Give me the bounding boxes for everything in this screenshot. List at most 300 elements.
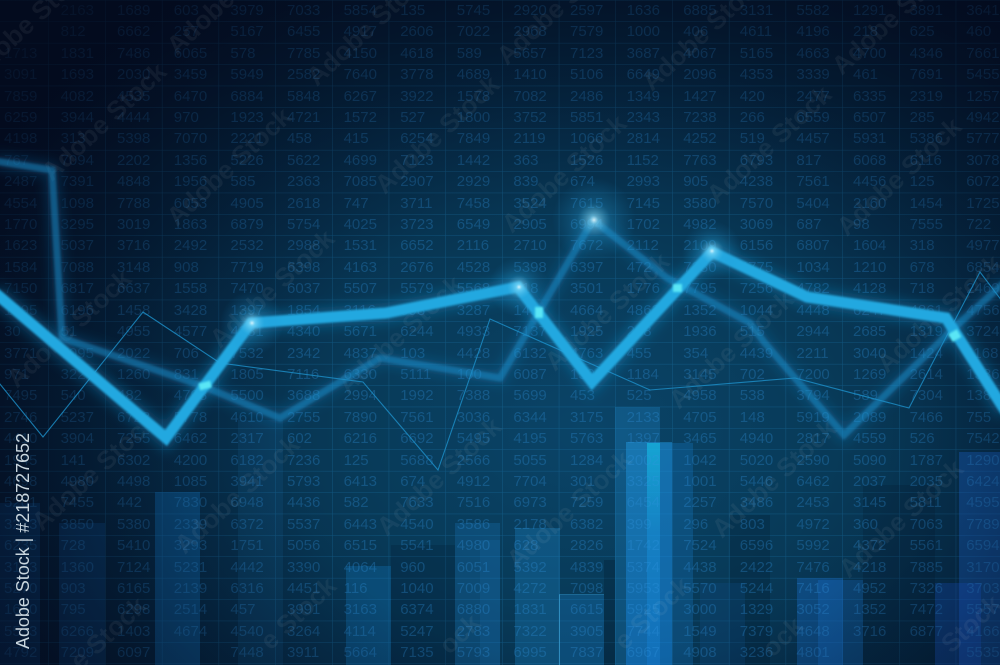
number table: 2929 xyxy=(457,173,490,190)
number table: 1034 xyxy=(796,259,830,276)
number table: 7640 xyxy=(344,66,377,83)
number table: 2477 xyxy=(796,88,830,105)
number table: 3287 xyxy=(457,302,490,319)
number table: 5777 xyxy=(966,130,1000,147)
number table: 4554 xyxy=(4,195,37,212)
number table: 1001 xyxy=(683,473,717,490)
number table: 1751 xyxy=(230,537,264,554)
number table: 908 xyxy=(174,259,199,276)
number table: 755 xyxy=(966,409,991,426)
number table: 678 xyxy=(910,259,935,276)
number table: 460 xyxy=(966,23,991,40)
number table: 4848 xyxy=(117,173,150,190)
number table: 525 xyxy=(627,387,652,404)
number table: 7476 xyxy=(796,559,830,576)
number table: 7238 xyxy=(683,109,717,126)
number table: 6596 xyxy=(740,537,773,554)
number table: 1776 xyxy=(627,280,660,297)
number table: 1349 xyxy=(627,88,660,105)
number table: 628 xyxy=(513,537,538,554)
number table: 5398 xyxy=(117,130,150,147)
number table: 7561 xyxy=(796,173,830,190)
number table: 5561 xyxy=(910,537,943,554)
number table: 1863 xyxy=(174,216,207,233)
number table: 2814 xyxy=(627,130,660,147)
number table: 6507 xyxy=(853,109,886,126)
number table: 1584 xyxy=(4,259,37,276)
number table: 3752 xyxy=(513,109,547,126)
number table: 6413 xyxy=(344,473,377,490)
watermark: Adobe Stock repeated: Adobe Stock xyxy=(833,453,970,584)
number table: 1640 xyxy=(4,601,37,618)
number table: 3069 xyxy=(740,216,773,233)
watermark: Adobe Stock repeated: Adobe Stock xyxy=(332,269,469,400)
number table: 6559 xyxy=(796,109,830,126)
number table: 728 xyxy=(61,537,86,554)
number table: 442 xyxy=(117,494,142,511)
number table: 1397 xyxy=(627,430,660,447)
number table: 4456 xyxy=(853,173,886,190)
number table: 4700 xyxy=(853,45,886,62)
number table: 6087 xyxy=(513,366,547,383)
number table: 2783 xyxy=(457,623,490,640)
number table: 7022 xyxy=(457,23,490,40)
number table: 7789 xyxy=(966,516,1000,533)
number table: 2968 xyxy=(513,23,547,40)
number table: 3148 xyxy=(117,259,150,276)
number table: 1386 xyxy=(966,366,1000,383)
number table: 125 xyxy=(910,173,935,190)
number table: 4861 xyxy=(910,302,943,319)
number table: 5090 xyxy=(853,452,886,469)
number table: 3891 xyxy=(910,2,943,19)
number table: 3145 xyxy=(683,366,717,383)
number table: 2119 xyxy=(513,130,546,147)
number table: 455 xyxy=(627,344,652,362)
number table: 2944 xyxy=(796,323,830,340)
number table: 2487 xyxy=(4,173,37,190)
number table: 3264 xyxy=(287,623,320,640)
number table: 1152 xyxy=(627,152,659,169)
number table: 3850 xyxy=(61,516,94,533)
number table: 6973 xyxy=(513,494,547,511)
number table: 7661 xyxy=(966,45,1000,62)
number table: 4663 xyxy=(796,45,830,62)
watermark: Adobe Stock repeated: e Stock xyxy=(608,570,696,655)
number table: 1168 xyxy=(966,344,998,362)
number table: 6216 xyxy=(344,430,377,447)
number table: 5811 xyxy=(910,494,942,511)
number table: 1770 xyxy=(4,216,37,233)
number table: 7458 xyxy=(457,195,490,212)
number table: 3143 xyxy=(4,559,37,576)
number table: 1042 xyxy=(683,452,717,469)
number table: 301 xyxy=(570,473,595,490)
number table: 6068 xyxy=(853,152,886,169)
number table: 4721 xyxy=(287,109,320,126)
number table: 2342 xyxy=(287,344,320,362)
number table: 7416 xyxy=(796,580,830,597)
number table: 4444 xyxy=(117,109,150,126)
number table: 7256 xyxy=(740,280,773,297)
number table: 674 xyxy=(400,473,425,490)
number table: 1623 xyxy=(4,237,37,254)
number table: 6470 xyxy=(174,88,207,105)
number table: 795 xyxy=(61,601,86,618)
watermark: Adobe Stock repeated: Adobe Stock xyxy=(706,413,843,544)
number table: 1831 xyxy=(61,45,94,62)
number table: 4082 xyxy=(61,88,94,105)
number table: 4912 xyxy=(457,473,490,490)
number table: 2469 xyxy=(966,280,1000,297)
number table: 5446 xyxy=(740,473,773,490)
number table: 5570 xyxy=(683,580,717,597)
watermark: Adobe Stock repeated: ock xyxy=(756,610,809,663)
number table: 3703 xyxy=(966,580,1000,597)
number table: 5231 xyxy=(174,559,207,576)
number table: 266 xyxy=(740,109,765,126)
number table: 6372 xyxy=(230,516,264,533)
number table: 7691 xyxy=(910,66,943,83)
number table: 457 xyxy=(230,601,255,618)
number table: 5763 xyxy=(570,430,603,447)
number table: 6156 xyxy=(740,237,773,254)
watermark: Adobe Stock repeated: Adobe Stock xyxy=(371,411,508,542)
number table: 7555 xyxy=(910,216,943,233)
number table: 2257 xyxy=(683,494,717,511)
number table: 2988 xyxy=(287,237,320,254)
number table: 4775 xyxy=(740,259,773,276)
number table: 6995 xyxy=(513,644,547,661)
number table: 582 xyxy=(344,494,369,511)
number table: 625 xyxy=(910,23,935,40)
number table: 7304 xyxy=(910,387,943,404)
watermark: Adobe Stock repeated: Adobe Stock xyxy=(831,111,968,242)
number table: 7795 xyxy=(683,280,717,297)
number table: 5699 xyxy=(513,387,547,404)
number table: 4218 xyxy=(853,559,886,576)
number table: 3131 xyxy=(740,2,773,19)
number table: 5657 xyxy=(513,45,547,62)
number table: 702 xyxy=(740,366,765,383)
number table: 1184 xyxy=(627,366,659,383)
number table: 2710 xyxy=(513,237,547,254)
number table: 4942 xyxy=(966,109,1000,126)
number table: 1085 xyxy=(174,473,207,490)
number table: 5949 xyxy=(230,66,264,83)
number table: 7094 xyxy=(61,152,94,169)
number table: 2614 xyxy=(910,366,943,383)
number table: 7085 xyxy=(344,173,377,190)
number table: 6397 xyxy=(570,259,603,276)
number table: 313 xyxy=(61,130,86,147)
number table: 6053 xyxy=(174,195,207,212)
number table: 687 xyxy=(796,216,821,233)
number table: 538 xyxy=(740,387,765,404)
number table: 2211 xyxy=(796,344,829,362)
number table: 458 xyxy=(287,130,312,147)
number table: 1427 xyxy=(683,88,717,105)
number table: 722 xyxy=(966,216,991,233)
number table: 3716 xyxy=(853,623,886,640)
number table: 7137 xyxy=(513,323,547,340)
number table: 7379 xyxy=(740,623,773,640)
number table: 6879 xyxy=(230,216,264,233)
number table: 1356 xyxy=(174,152,207,169)
number table: 3428 xyxy=(174,302,207,319)
number table: 2993 xyxy=(627,173,660,190)
number table: 3905 xyxy=(570,623,603,640)
number table: 5244 xyxy=(740,580,773,597)
number table: 4381 xyxy=(230,323,264,340)
number table: 4798 xyxy=(174,387,207,404)
number table: 5848 xyxy=(287,88,320,105)
number table: 4958 xyxy=(683,387,717,404)
number table: 4763 xyxy=(570,344,603,362)
number table: 7561 xyxy=(400,409,434,426)
number table: 2422 xyxy=(740,559,773,576)
number table: 5237 xyxy=(61,409,94,426)
number table: 747 xyxy=(344,195,369,212)
number table: 7033 xyxy=(287,2,320,19)
number table: 5270 xyxy=(4,580,37,597)
number table: 5455 xyxy=(966,66,1000,83)
number table: 3145 xyxy=(853,494,886,511)
watermark: Adobe Stock repeated: Adobe Stock xyxy=(204,223,341,354)
number table: 4498 xyxy=(117,473,150,490)
number table: 2221 xyxy=(230,130,264,147)
number table: 6454 xyxy=(627,494,660,511)
number table: 6723 xyxy=(117,409,150,426)
number table: 7230 xyxy=(683,259,717,276)
number table: 4705 xyxy=(683,409,717,426)
number table: 2096 xyxy=(683,66,717,83)
number table: 6182 xyxy=(230,452,264,469)
number table: 589 xyxy=(853,387,878,404)
number table: 5410 xyxy=(117,537,150,554)
number table: 7524 xyxy=(683,537,717,554)
number table: 7532 xyxy=(230,344,264,362)
number table: 5056 xyxy=(287,537,320,554)
number table: 5851 xyxy=(570,109,603,126)
number table: 6254 xyxy=(400,130,434,147)
number table: 6994 xyxy=(570,216,603,233)
number table: 7890 xyxy=(344,409,377,426)
number table: 3052 xyxy=(796,601,830,618)
number table: 5106 xyxy=(570,66,603,83)
number table: 5688 xyxy=(400,452,434,469)
number table: 3040 xyxy=(853,344,886,362)
number table: 2532 xyxy=(230,237,264,254)
number table: 1725 xyxy=(966,195,1000,212)
number table: 125 xyxy=(344,452,369,469)
number table: 5165 xyxy=(740,45,773,62)
number table: 767 xyxy=(4,152,29,169)
number table: 2597 xyxy=(570,2,603,19)
number table: 1269 xyxy=(853,366,886,383)
number table: 4372 xyxy=(853,537,886,554)
number table: 1787 xyxy=(910,452,943,469)
number table: 903 xyxy=(61,580,86,597)
number table: 3293 xyxy=(174,537,207,554)
number table: 7388 xyxy=(457,387,490,404)
number table: 1260 xyxy=(117,366,150,383)
number table: 135 xyxy=(400,2,425,19)
number table: 4442 xyxy=(230,559,264,576)
number table: 7704 xyxy=(513,473,547,490)
number table: 839 xyxy=(513,173,538,190)
number table: 6247 xyxy=(853,302,886,319)
number table: 3170 xyxy=(966,559,1000,576)
number table: 1925 xyxy=(570,323,603,340)
number table: 1319 xyxy=(910,323,943,340)
number table: 6854 xyxy=(966,259,1000,276)
number table: 7763 xyxy=(683,152,717,169)
number table: 6515 xyxy=(344,537,377,554)
number table: 1604 xyxy=(853,237,886,254)
number table: 3390 xyxy=(287,559,320,576)
number table: 7209 xyxy=(61,644,94,661)
number table: 3778 xyxy=(400,66,434,83)
number table: 148 xyxy=(740,409,765,426)
number table: 7516 xyxy=(457,494,490,511)
number table: 2566 xyxy=(457,452,490,469)
number table: 3944 xyxy=(61,109,94,126)
number table: 4252 xyxy=(683,130,717,147)
number table: 2109 xyxy=(683,237,717,254)
watermark: Adobe Stock repeated: Adobe Stock xyxy=(169,429,306,560)
number table: 1742 xyxy=(627,537,660,554)
number table: 6374 xyxy=(400,601,434,618)
number table: 5579 xyxy=(400,280,434,297)
number table: 5664 xyxy=(344,644,377,661)
number table: 5622 xyxy=(287,152,320,169)
number table: 6615 xyxy=(570,601,603,618)
number table: 6462 xyxy=(796,473,830,490)
number table: 1066 xyxy=(570,130,603,147)
number table: 3641 xyxy=(966,2,1000,19)
number table: 116 xyxy=(344,580,368,597)
number table: 1410 xyxy=(513,66,547,83)
number table: 7785 xyxy=(287,45,320,62)
number table: 2317 xyxy=(230,430,264,447)
number table: 5854 xyxy=(344,2,377,19)
number table: 1693 xyxy=(61,66,94,83)
watermark: Adobe Stock repeated: Adobe Stock xyxy=(701,79,838,210)
number table: 4195 xyxy=(513,430,547,447)
number table: 2139 xyxy=(174,580,207,597)
number table: 2339 xyxy=(174,516,207,533)
number table: 420 xyxy=(740,88,765,105)
number table: 51 xyxy=(61,323,77,340)
number table: 1526 xyxy=(570,152,603,169)
number table: 803 xyxy=(740,516,765,533)
number table: 905 xyxy=(683,173,708,190)
number table: 4196 xyxy=(796,23,830,40)
number table: 1531 xyxy=(344,237,377,254)
number table: 5020 xyxy=(740,452,773,469)
number table: 3716 xyxy=(117,237,150,254)
number table: 4340 xyxy=(287,323,320,340)
number table: 7124 xyxy=(117,559,150,576)
number table: 2514 xyxy=(174,601,207,618)
number table: 6344 xyxy=(513,409,547,426)
number table: 7570 xyxy=(740,195,773,212)
number table: 1095 xyxy=(4,302,37,319)
number table: 1210 xyxy=(853,259,886,276)
number table: 3000 xyxy=(683,601,717,618)
number table: 453 xyxy=(570,387,595,404)
number table: 4064 xyxy=(344,559,377,576)
number table: 2606 xyxy=(400,23,434,40)
number table: 7495 xyxy=(4,387,37,404)
number table: 5404 xyxy=(796,195,830,212)
number table: 4540 xyxy=(230,623,264,640)
number table: 5495 xyxy=(457,430,490,447)
number table: 7070 xyxy=(174,130,207,147)
number table: 515 xyxy=(740,323,765,340)
number table: 4940 xyxy=(740,430,773,447)
number table: 602 xyxy=(287,430,312,447)
number table: 7391 xyxy=(61,173,94,190)
number table: 2116 xyxy=(457,237,489,254)
number table: 1257 xyxy=(966,88,1000,105)
number table: 4610 xyxy=(230,409,264,426)
watermark: Adobe Stock repeated: Adobe Stock xyxy=(369,69,506,200)
number table: 7472 xyxy=(910,601,943,618)
number table: 6880 xyxy=(457,601,490,618)
number table: 7455 xyxy=(61,494,94,511)
number table: 4025 xyxy=(344,216,377,233)
number table: 2826 xyxy=(570,537,603,554)
number table: 7135 xyxy=(400,644,434,661)
number table: 2202 xyxy=(117,152,150,169)
number table: 4272 xyxy=(513,580,547,597)
number table: 5111 xyxy=(400,366,431,383)
number table: 3501 xyxy=(570,280,603,297)
number table: 6443 xyxy=(344,516,377,533)
number table: 6065 xyxy=(174,45,207,62)
number table: 960 xyxy=(400,559,425,576)
watermark: Adobe Stock repeated: Adobe Stock xyxy=(26,406,163,537)
watermark: Adobe Stock repeated: Adobe Stock xyxy=(539,246,676,377)
number table: 3163 xyxy=(344,601,377,618)
number table: 1702 xyxy=(627,216,660,233)
number table: 360 xyxy=(853,516,878,533)
number table: 1689 xyxy=(117,2,150,19)
number table: 5754 xyxy=(287,216,320,233)
number table: 1992 xyxy=(400,387,434,404)
number table: 1854 xyxy=(287,302,320,319)
number table: 103 xyxy=(400,344,425,362)
number table: 6235 xyxy=(4,537,37,554)
number table: 4439 xyxy=(740,344,773,362)
number table: 3794 xyxy=(796,387,830,404)
number table: 4699 xyxy=(344,152,377,169)
watermark: Adobe Stock repeated: Adobe Stock xyxy=(496,108,633,239)
number table: 149 xyxy=(513,302,538,319)
number table: 7322 xyxy=(513,623,547,640)
number table: 3019 xyxy=(117,216,150,233)
number table: 4618 xyxy=(400,45,434,62)
number table: 3941 xyxy=(230,473,264,490)
number table: 589 xyxy=(457,45,482,62)
number table: 718 xyxy=(513,280,538,297)
number table: 3771 xyxy=(4,344,37,362)
number table: 1000 xyxy=(627,23,660,40)
number table: 3979 xyxy=(230,2,264,19)
number table: 4163 xyxy=(344,259,377,276)
